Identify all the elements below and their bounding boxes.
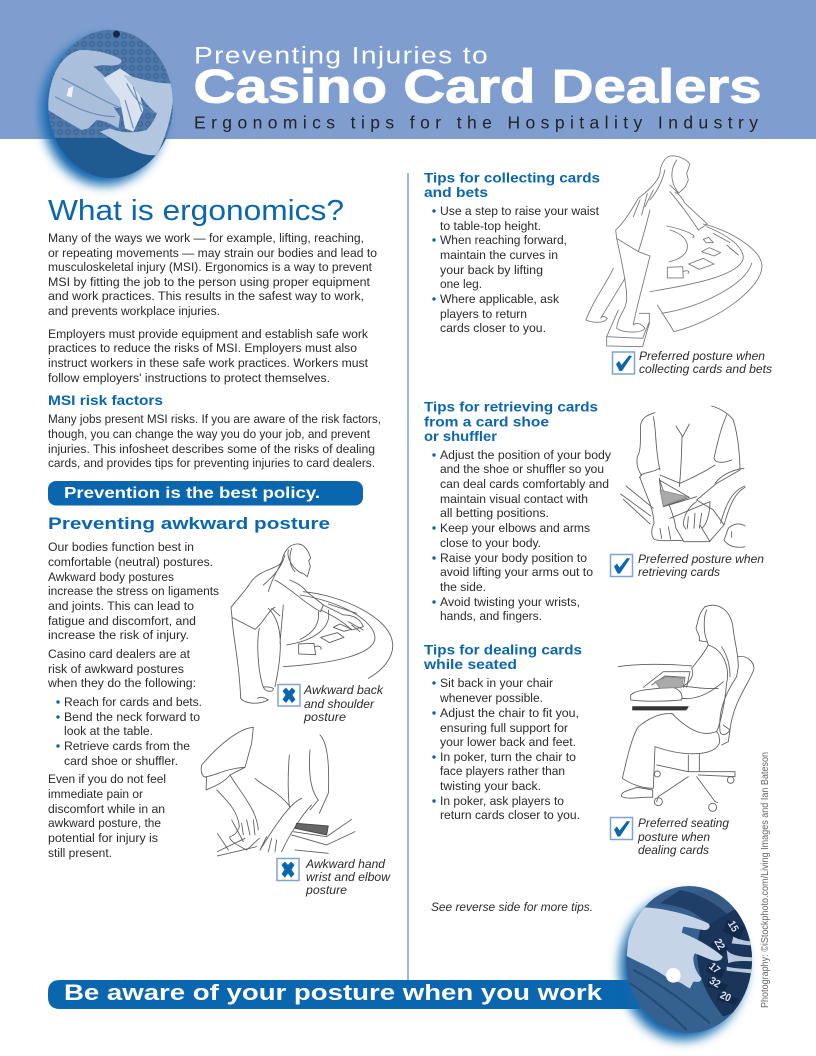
icon: check retrieving — [610, 554, 632, 576]
column divider — [407, 173, 409, 980]
bullets: dealing: return cards closer to you. — [440, 808, 580, 822]
closing text: awkward posture, the — [48, 816, 161, 830]
heading: dealing — [423, 642, 582, 672]
title: Ergonomics tips for the Hospitality Industry — [194, 112, 758, 132]
heading: collecting: Tips for collecting cards — [424, 170, 600, 186]
heading: retrieving: or shuffler — [424, 429, 498, 444]
heading: dealing: Tips for dealing cards — [424, 642, 582, 658]
section: tips for dealing cards — [423, 642, 582, 822]
caption: awkward hand — [305, 857, 391, 897]
awkward posture bullets: Retrieve cards from the — [64, 739, 190, 753]
bullets: collecting: to table-top height. — [440, 219, 541, 233]
heading: dealing: while seated — [423, 657, 517, 672]
caption: dealing — [637, 816, 729, 857]
caption: awkward back: and shoulder — [304, 697, 375, 711]
bullets: collecting: Where applicable, ask — [440, 292, 560, 306]
heading: what is ergonomics: What is ergonomics? — [48, 195, 344, 227]
caption: retrieving — [638, 552, 764, 579]
intro paragraphs: and prevents workplace injuries. — [48, 304, 220, 318]
photo: dealer hands shuffling cards — [40, 25, 180, 185]
awkward posture text: increase the risk of injury. — [48, 628, 189, 642]
bullets: retrieving: hands, and fingers. — [440, 609, 542, 623]
caption: collecting: Preferred posture when — [639, 349, 765, 363]
awkward posture bullets: Bend the neck forward to — [64, 710, 200, 724]
bullets: retrieving: Avoid twisting your wrists, — [440, 595, 580, 609]
awkward posture bullets: card shoe or shuffler. — [64, 754, 178, 768]
caption: dealing: posture when — [637, 830, 710, 844]
bullets: retrieving — [432, 448, 612, 623]
banner: be aware of your posture — [48, 980, 640, 1009]
intro paragraphs: MSI by fitting the job to the person using proper equipment — [48, 275, 371, 289]
caption: awkward back: Awkward back — [303, 683, 384, 697]
awkward posture text: and joints. This can lead to — [48, 599, 194, 613]
bullets: retrieving: and the shoe or shuffler so you — [440, 462, 604, 476]
bullets: dealing: Adjust the chair to fit you, — [440, 706, 579, 720]
bullets: retrieving: the side. — [440, 580, 486, 594]
icon: X awkward hand — [277, 858, 299, 880]
bullets: collecting: Use a step to raise your waist — [440, 204, 600, 218]
illustration: preferred seated posture — [618, 605, 754, 811]
section: tips for retrieving cards — [424, 400, 612, 623]
awkward posture text — [47, 540, 219, 690]
bullets: retrieving: maintain visual contact with — [440, 492, 588, 506]
caption: awkward back: posture — [303, 710, 346, 724]
heading: retrieving: from a card shoe — [424, 414, 549, 430]
risk factors text: Many jobs present MSI risks. If you are aware of the risk factors, — [48, 412, 381, 426]
caption: retrieving: retrieving cards — [638, 565, 720, 579]
photo: hand on roulette wheel: 15 — [725, 919, 740, 934]
bullets: retrieving: Raise your body position to — [440, 551, 587, 565]
bullets: retrieving: Adjust the position of your body — [440, 448, 612, 462]
bullets: collecting: players to return — [440, 307, 527, 321]
bullets: collecting: cards closer to you. — [440, 321, 546, 335]
intro paragraphs: Employers must provide equipment and establish safe work — [48, 327, 369, 341]
closing text: still present. — [48, 846, 112, 860]
icon: check dealing — [610, 818, 632, 840]
closing text: Even if you do not feel — [48, 772, 166, 786]
heading: collecting: and bets — [424, 185, 488, 200]
bullets: collecting: maintain the curves in — [440, 248, 558, 262]
awkward posture bullets: Reach for cards and bets. — [64, 695, 202, 709]
intro paragraphs: and work practices. This results in the safest way to work, — [48, 289, 364, 303]
awkward posture bullets: look at the table. — [64, 724, 153, 738]
caption: collecting — [639, 349, 772, 376]
heading: retrieving: Tips for retrieving cards — [424, 400, 598, 414]
illustration: preferred posture collecting — [586, 156, 762, 347]
awkward posture text: comfortable (neutral) postures. — [48, 555, 213, 569]
caption: dealing: Preferred seating — [638, 816, 729, 830]
bullets: retrieving: all betting positions. — [440, 506, 549, 520]
awkward posture text: Our bodies function best in — [48, 540, 194, 554]
awkward posture text: fatigue and discomfort, and — [48, 614, 196, 628]
intro paragraphs: follow employers' instructions to protect themselves. — [48, 371, 330, 385]
risk factors text: injuries. This infosheet describes some of the risks of dealing — [48, 442, 375, 456]
intro paragraphs: or repeating movements — may strain our bodies and lead to — [48, 246, 377, 260]
risk factors text: cards, and provides tips for preventing injuries to card dealers. — [48, 456, 375, 470]
awkward posture text: Awkward body postures — [48, 570, 174, 584]
closing text — [48, 772, 166, 860]
photo: hand on roulette wheel: 17 — [706, 961, 722, 977]
icon: check collecting — [612, 352, 634, 374]
intro paragraphs — [48, 231, 377, 385]
intro paragraphs: practices to reduce the risks of MSI. Employers must also — [48, 341, 357, 355]
bullets: retrieving: can deal cards comfortably and — [440, 477, 609, 491]
bullets: dealing: ensuring full support for — [440, 721, 568, 735]
risk factors text: though, you can change the way you do your job, and prevent — [48, 427, 371, 441]
caption: retrieving: Preferred posture when — [638, 552, 764, 566]
heading: retrieving — [424, 400, 598, 444]
awkward posture text: Casino card dealers are at — [48, 647, 191, 661]
caption: collecting: collecting cards and bets — [639, 362, 772, 376]
illustration: awkward hand wrist and elbow posture — [201, 727, 355, 856]
awkward posture text: when they do the following: — [47, 676, 196, 690]
bullets: dealing: twisting your back. — [440, 779, 541, 793]
caption: dealing: dealing cards — [638, 843, 709, 857]
closing text: immediate pain or — [48, 787, 143, 801]
closing text: discomfort while in an — [48, 802, 165, 816]
awkward posture text: risk of awkward postures — [48, 662, 184, 676]
intro paragraphs: instruct workers in these safe work practices. Workers must — [48, 356, 369, 370]
bullets: dealing: whenever possible. — [439, 691, 543, 705]
bullets: collecting: your back by lifting — [440, 263, 543, 277]
bullets: dealing: Sit back in your chair — [440, 676, 553, 690]
title — [194, 42, 762, 132]
risk factors text — [48, 412, 381, 470]
bullets: retrieving: close to your body. — [440, 536, 541, 550]
bullets: dealing — [432, 676, 580, 822]
bullets: dealing: your lower back and feet. — [440, 735, 576, 749]
bullets: collecting — [432, 204, 600, 335]
bullets: dealing: In poker, turn the chair to — [440, 750, 576, 764]
heading: collecting — [424, 170, 600, 200]
closing text: potential for injury is — [48, 831, 158, 845]
illustration: preferred posture retrieving — [621, 406, 745, 547]
photo: hand on roulette wheel: 32 — [707, 975, 722, 991]
callout: prevention is the best policy — [48, 481, 363, 506]
bullets: dealing: In poker, ask players to — [440, 794, 564, 808]
heading: MSI risk factors: MSI risk factors — [48, 393, 163, 408]
title: Casino Card Dealers — [194, 60, 762, 112]
photo: hand on roulette wheel — [620, 880, 760, 1040]
photo: hand on roulette wheel: 22 — [711, 937, 727, 952]
photography credit: Photography: ©iStockphoto.com/Living Images and Ian Bateson — [760, 752, 771, 1008]
section: tips for collecting cards — [424, 170, 600, 335]
caption: awkward hand: Awkward hand — [305, 857, 386, 871]
bullets: retrieving: avoid lifting your arms out to — [440, 565, 593, 579]
intro paragraphs: musculoskeletal injury (MSI). Ergonomics is a way to prevent — [48, 260, 373, 274]
bullets: collecting: one leg. — [440, 277, 482, 291]
caption: awkward back — [303, 683, 384, 724]
awkward posture text: increase the stress on ligaments — [48, 584, 219, 598]
note: see reverse side: See reverse side for more tips. — [431, 900, 593, 914]
header band — [0, 0, 816, 139]
illustration: awkward back and shoulder posture — [231, 544, 393, 703]
caption: awkward hand: posture — [305, 883, 347, 897]
callout: prevention is the best policy: Prevention is the best policy. — [64, 485, 320, 502]
photo: hand on roulette wheel: 20 — [718, 990, 733, 1005]
bullets: dealing: face players rather than — [440, 764, 565, 778]
banner: be aware of your posture: Be aware of your posture when you work — [64, 980, 603, 1005]
awkward posture bullets — [56, 695, 202, 768]
bullets: collecting: When reaching forward, — [440, 233, 567, 247]
bullets: retrieving: Keep your elbows and arms — [440, 521, 590, 535]
caption: awkward hand: wrist and elbow — [306, 870, 391, 884]
heading: preventing awkward posture: Preventing awkward posture — [48, 514, 330, 533]
title: Preventing Injuries to — [194, 42, 489, 70]
intro paragraphs: Many of the ways we work — for example, lifting, reaching, — [48, 231, 364, 245]
icon: X awkward back — [278, 684, 300, 706]
